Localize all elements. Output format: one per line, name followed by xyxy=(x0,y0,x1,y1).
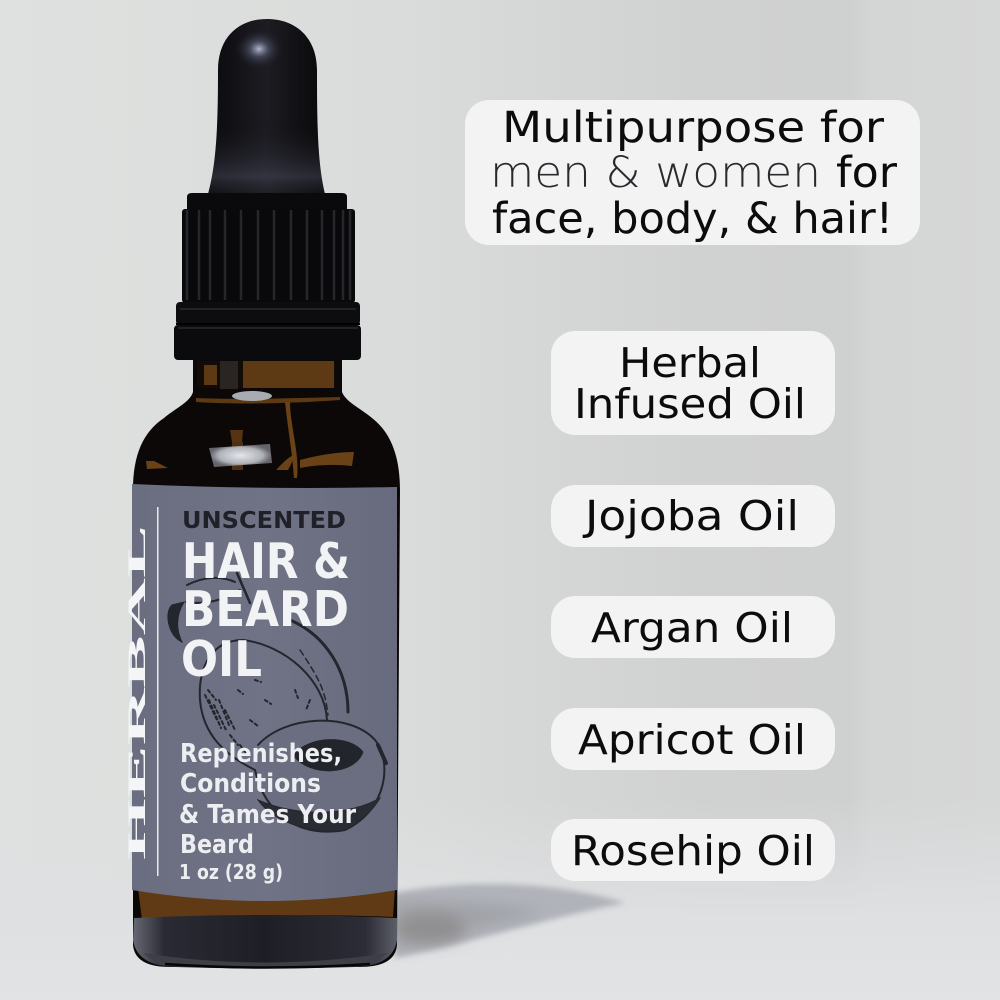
ingredient: Herbal Infused Oil xyxy=(551,331,835,435)
callout: multipurpose: face, body, & hair! xyxy=(492,194,893,244)
bottle shadow xyxy=(395,884,625,958)
base xyxy=(133,915,397,968)
ingredient: Herbal Infused Oil: Herbal xyxy=(619,339,761,387)
ingredient: Rosehip Oil xyxy=(551,819,835,881)
callout: multipurpose: men & women xyxy=(490,148,821,198)
ingredient: Argan Oil: Argan Oil xyxy=(591,604,793,652)
side brand text: HERBAL xyxy=(124,525,151,860)
ingredient: Argan Oil xyxy=(551,596,835,658)
ingredient: Jojoba Oil: Jojoba Oil xyxy=(582,492,799,540)
dropper cap xyxy=(174,193,361,360)
illustration: apricot fruit xyxy=(168,573,386,832)
callout: multipurpose: for xyxy=(836,148,897,198)
glass neck and body xyxy=(133,360,400,968)
ingredient: Rosehip Oil: Rosehip Oil xyxy=(571,827,815,875)
ingredient: Apricot Oil: Apricot Oil xyxy=(578,716,806,764)
label description: 1 oz (28 g) xyxy=(179,860,283,884)
label description xyxy=(179,739,356,884)
label heading: OIL xyxy=(181,631,262,688)
ingredient: Herbal Infused Oil: Infused Oil xyxy=(574,380,806,428)
divider line xyxy=(157,507,158,876)
base amber band xyxy=(138,888,395,920)
label heading: UNSCENTED xyxy=(182,508,346,534)
product bottle xyxy=(124,19,400,968)
dropper bulb xyxy=(208,19,325,194)
label description: Replenishes, xyxy=(180,739,342,769)
label description: & Tames Your xyxy=(179,800,356,830)
ingredient: Apricot Oil xyxy=(551,708,835,770)
ingredient: Jojoba Oil xyxy=(551,485,835,547)
label heading: BEARD xyxy=(182,581,349,638)
callout: multipurpose: Multipurpose for xyxy=(502,103,884,153)
label description: Conditions xyxy=(180,769,321,799)
label xyxy=(124,484,397,901)
label heading xyxy=(181,508,350,688)
label heading: HAIR & xyxy=(182,533,350,590)
callout: multipurpose xyxy=(465,100,920,245)
label description: Beard xyxy=(180,830,254,860)
